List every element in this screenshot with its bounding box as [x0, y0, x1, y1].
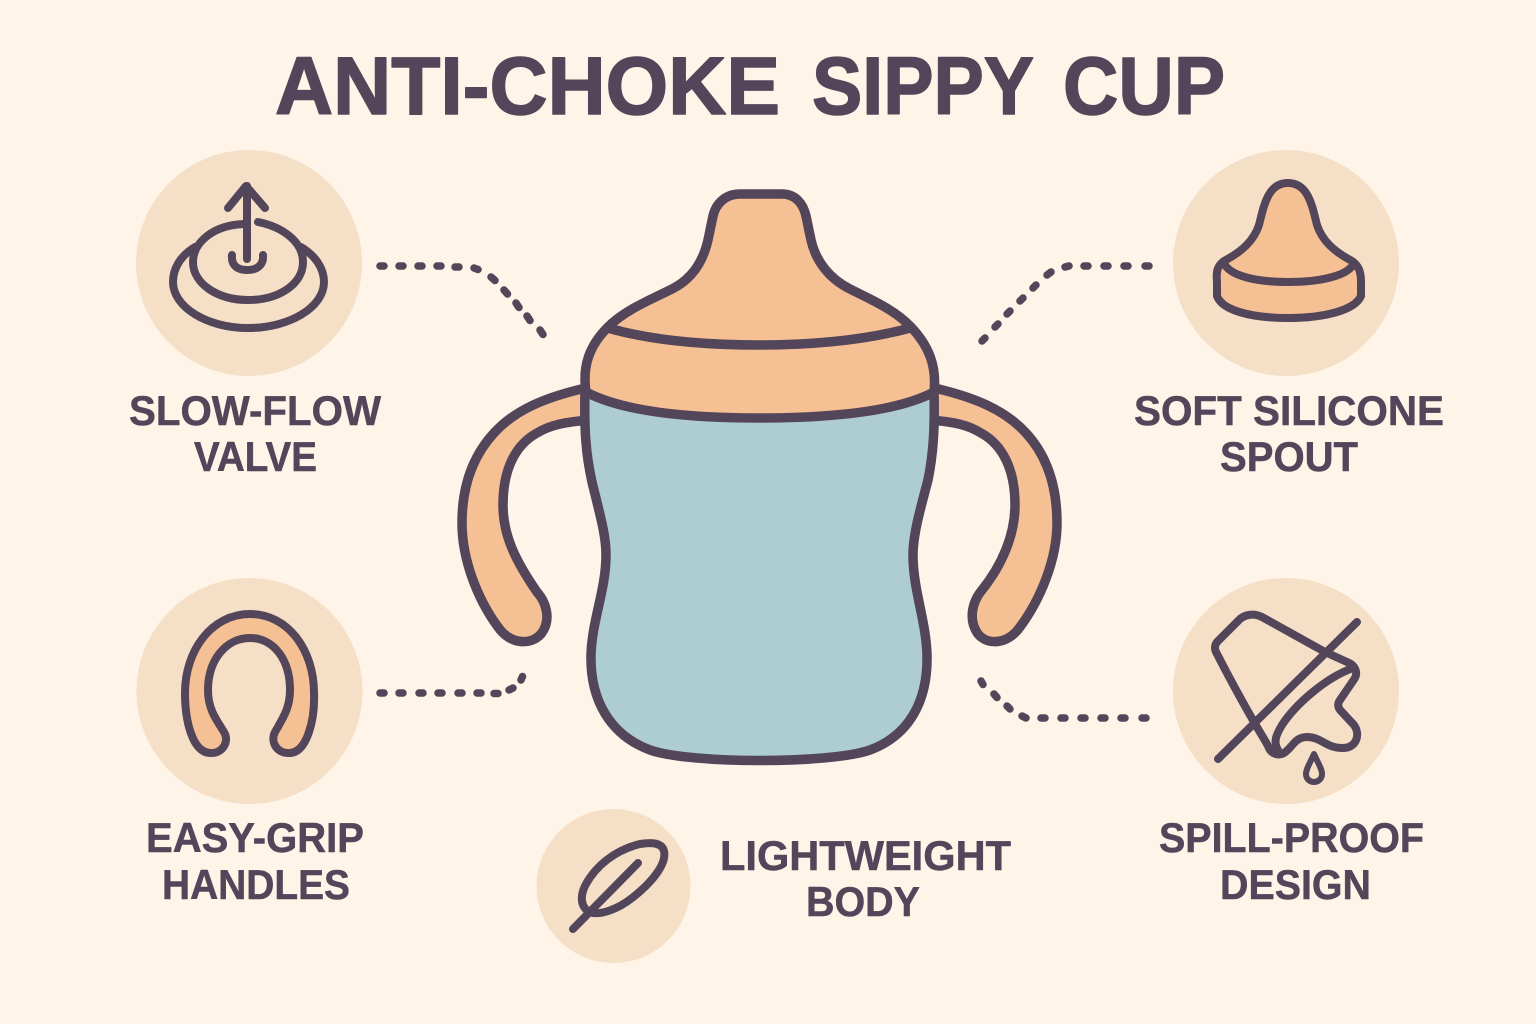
label: SLOW-FLOW: [129, 387, 381, 434]
icon background circle: [536, 809, 690, 963]
label: EASY-GRIP: [146, 814, 364, 861]
icon: valve with upward arrow: [173, 186, 324, 328]
icon background circle: [136, 578, 362, 804]
label: BODY: [806, 878, 920, 925]
label: SPILL-PROOF: [1159, 814, 1424, 861]
label: VALVE: [194, 433, 317, 480]
icon: silicone spout: [1217, 183, 1361, 318]
spout and lid: [585, 194, 935, 418]
panel: spill-proof design: [1159, 578, 1424, 908]
label: SOFT SILICONE: [1134, 387, 1444, 434]
icon background circle: [1173, 150, 1399, 376]
connector: easy-grip handles: [380, 676, 522, 694]
icon background circle: [136, 150, 362, 376]
label: [1159, 814, 1424, 908]
icon: feather: [573, 843, 664, 929]
label: [129, 387, 381, 480]
cup body: [585, 392, 934, 760]
connector: spill-proof design: [981, 681, 1146, 718]
panel: easy-grip handles: [136, 578, 364, 908]
right handle: [930, 387, 1057, 642]
icon background circle: [1173, 578, 1399, 804]
icon: tipped cup with cross-out and drop: [1215, 615, 1357, 782]
label: [1134, 387, 1444, 480]
label: HANDLES: [162, 861, 350, 908]
panel: slow-flow valve: [129, 150, 381, 480]
lid collar line: [608, 328, 910, 345]
title: ANTI-CHOKE: [275, 41, 780, 132]
panel: lightweight body: [536, 809, 1011, 963]
title: [275, 41, 1225, 132]
connector: soft silicone spout: [982, 266, 1149, 341]
label: [720, 832, 1011, 925]
left handle: [462, 387, 590, 642]
label: DESIGN: [1220, 861, 1371, 908]
icon: curved handle: [185, 614, 314, 753]
panel: soft silicone spout: [1134, 150, 1444, 480]
connector: slow-flow valve: [380, 266, 543, 334]
central sippy cup illustration: [462, 194, 1057, 760]
label: [146, 814, 364, 908]
label: SPOUT: [1220, 433, 1358, 480]
title: CUP: [1063, 41, 1225, 132]
label: LIGHTWEIGHT: [720, 832, 1011, 879]
title: SIPPY: [812, 41, 1034, 132]
